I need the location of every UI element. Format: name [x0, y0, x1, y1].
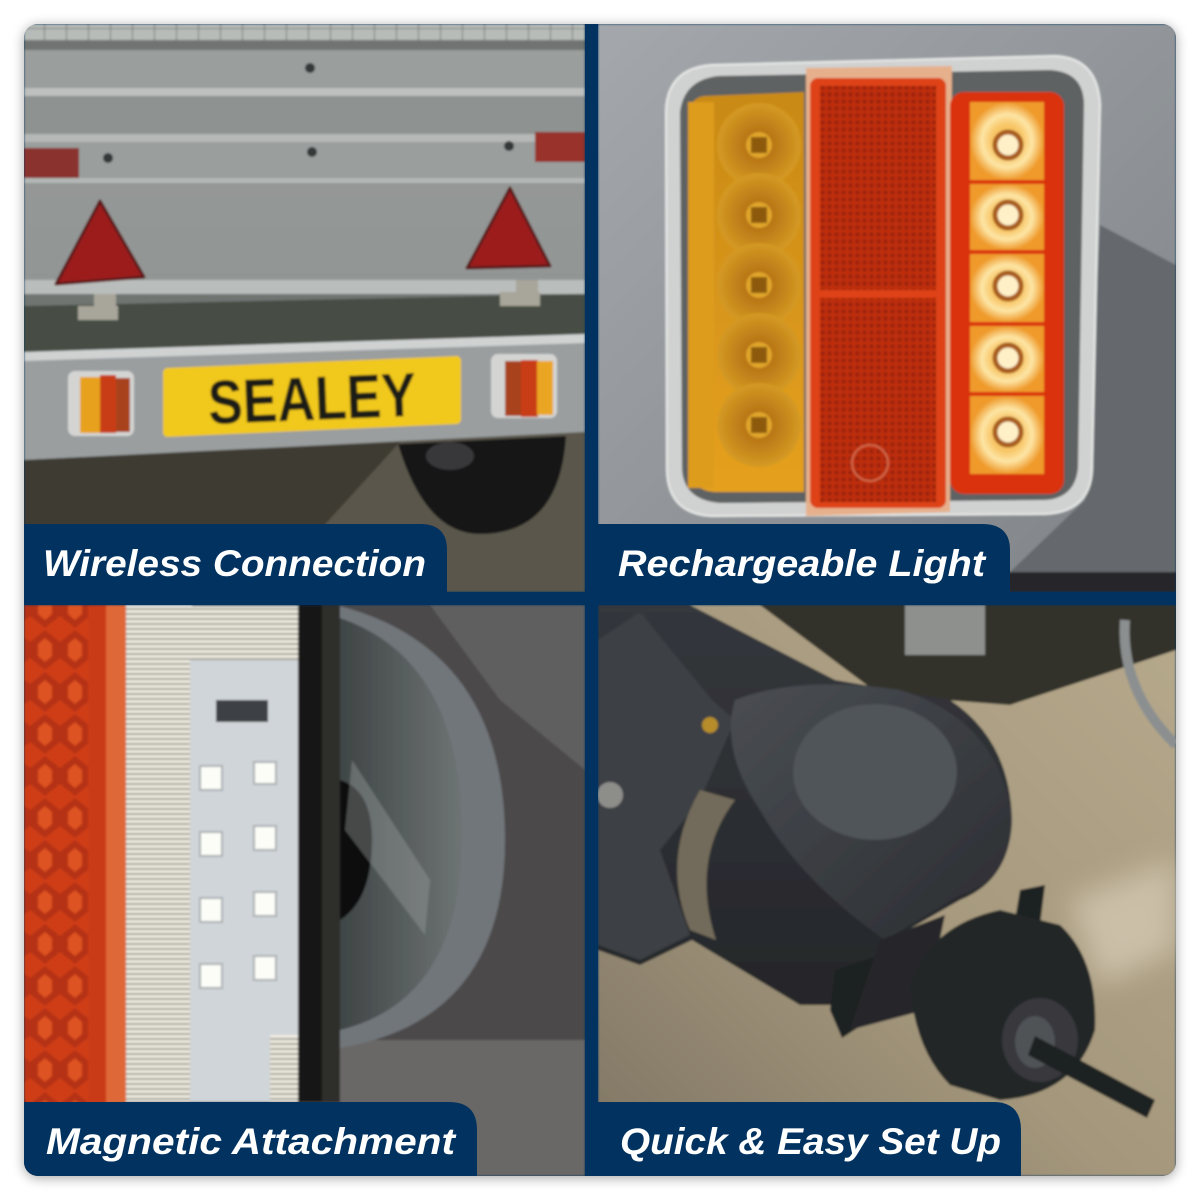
label tab: magnetic attachment: Magnetic Attachment [46, 1121, 457, 1162]
label tab: magnetic attachment [24, 1102, 477, 1176]
icon: trailer wheel [398, 436, 566, 534]
panel: quick and easy set up photo [597, 605, 1176, 1176]
amber lens [688, 92, 804, 492]
icon: tail light lamp [666, 56, 1100, 516]
icon: wheel drum [340, 606, 505, 1048]
icon: right trailer light [491, 354, 557, 418]
panel: rechargeable light photo [598, 24, 1176, 592]
silver bumper [24, 340, 585, 460]
number plate: SEALEY [207, 361, 417, 438]
label tab: quick and easy set up: Quick & Easy Set Up [620, 1121, 1001, 1162]
label tab: quick and easy set up [586, 1102, 1021, 1176]
label tab: rechargeable light [598, 524, 1010, 592]
label tab: wireless connection: Wireless Connection [43, 543, 426, 584]
icon: bolts [103, 63, 514, 163]
LED circuit board [126, 605, 340, 1102]
icon: warning triangles [56, 201, 144, 284]
label tab: wireless connection [24, 524, 447, 592]
horizontal panel gutter [24, 592, 1176, 605]
dark chassis band [24, 294, 585, 356]
icon: hinges [78, 280, 540, 320]
red LED lens [950, 92, 1064, 494]
ground [128, 431, 585, 592]
red reflector [806, 66, 952, 516]
lamp housing [666, 56, 1100, 516]
icon: cable gland [910, 910, 1155, 1118]
label tab: rechargeable light: Rechargeable Light [618, 543, 987, 584]
red lens edge [24, 605, 88, 1105]
vertical panel gutter [585, 24, 598, 1176]
icon: red side markers [24, 148, 79, 178]
icon: left trailer light [68, 371, 134, 436]
panel: magnetic attachment photo [24, 605, 585, 1176]
panel: wireless connection photo [24, 24, 585, 592]
icon: trailer plug body [597, 605, 1045, 1038]
